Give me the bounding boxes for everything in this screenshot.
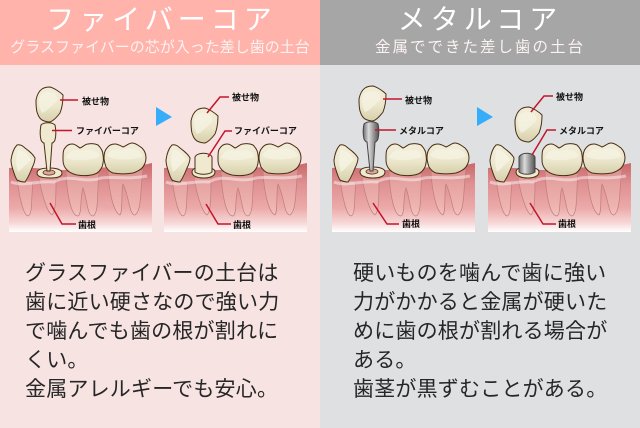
diagrams: fiber core	[9, 86, 307, 232]
label: metal core: メタルコア	[399, 125, 444, 136]
panel: fiber core	[0, 0, 320, 428]
label: root: 歯根	[233, 219, 251, 230]
panel: metal core	[320, 0, 640, 428]
label: crown: 被せ物	[232, 92, 259, 102]
label: crown: 被せ物	[405, 94, 432, 106]
arrow	[156, 107, 172, 126]
label: fiber core: ファイバーコア	[76, 126, 139, 136]
diagram: metal core post above tooth	[332, 86, 475, 232]
text: fiber core benefits: グラスファイバーの土台は	[25, 262, 279, 285]
text: metal core drawbacks: 力がかかると金属が硬いた	[353, 291, 607, 314]
heading: fiber core: ファイバーコア	[46, 4, 277, 35]
diagrams: metal core	[332, 86, 631, 232]
text: metal core drawbacks: めに歯の根が割れる場合が	[353, 320, 607, 343]
text: metal core drawbacks: 硬いものを噛んで歯に強い	[353, 262, 606, 285]
text: metal core drawbacks: 歯茎が黒ずむことがある。	[353, 378, 607, 401]
text: fiber core benefits: 歯に近い硬さなので強い力	[25, 291, 279, 314]
subheading: metal core: 金属でできた差し歯の土台	[375, 39, 585, 56]
label: crown: 被せ物	[556, 91, 583, 102]
subheading: fiber core: グラスファイバーの芯が入った差し歯の土台	[10, 39, 310, 56]
label: crown: 被せ物	[82, 96, 109, 106]
text: fiber core benefits	[25, 262, 279, 401]
header: fiber core	[0, 0, 320, 65]
label: metal core: メタルコア	[559, 125, 604, 136]
diagram: fiber core placed on tooth	[164, 92, 307, 232]
label: root: 歯根	[558, 218, 576, 229]
heading: metal core: メタルコア	[398, 4, 562, 35]
header: metal core	[320, 0, 640, 65]
text: fiber core benefits: 金属アレルギーでも安心。	[25, 378, 278, 401]
label: root: 歯根	[78, 219, 96, 230]
label: root: 歯根	[402, 218, 420, 229]
text: fiber core benefits: くい。	[25, 349, 89, 372]
label: fiber core: ファイバーコア	[234, 126, 297, 136]
text: fiber core benefits: で噛んでも歯の根が割れに	[25, 320, 278, 343]
text: metal core drawbacks: ある。	[353, 349, 417, 372]
text: metal core drawbacks	[353, 262, 607, 401]
arrow	[477, 107, 493, 126]
diagram: fiber core post above tooth	[9, 87, 152, 232]
diagram: metal core placed on tooth	[488, 91, 631, 232]
